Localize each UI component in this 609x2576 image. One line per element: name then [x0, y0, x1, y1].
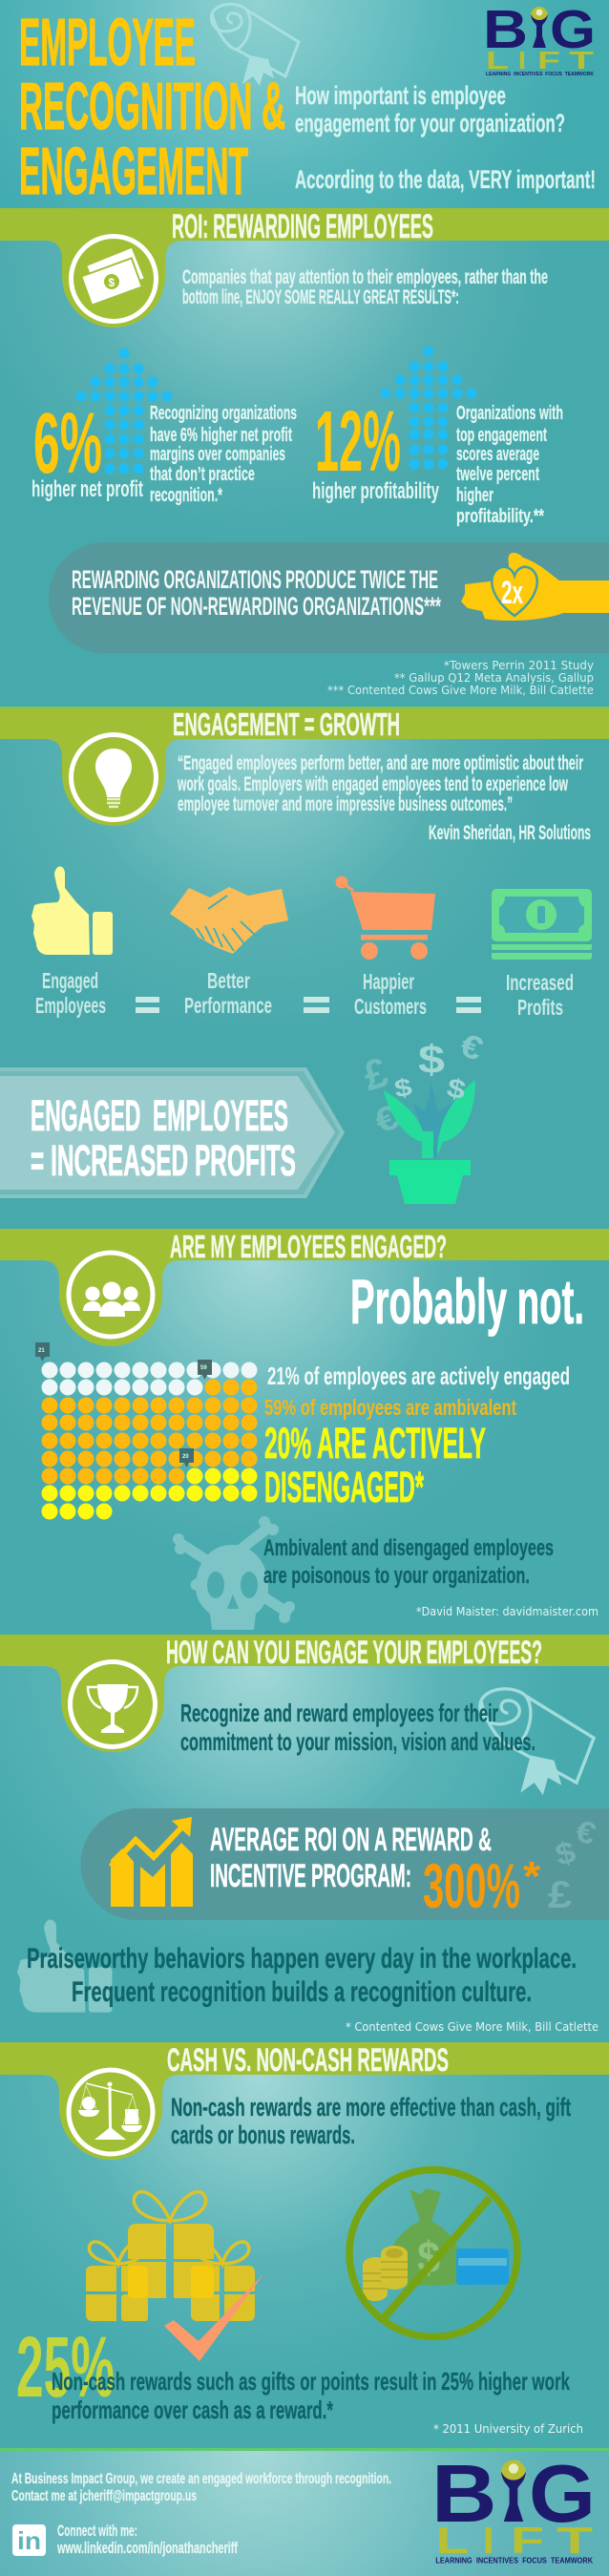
connect text: www.linkedin.com/in/jonathancheriff [56, 2539, 238, 2557]
heading band [0, 707, 609, 742]
equation labels: Customers [354, 994, 427, 1019]
icon: rising chart [111, 1817, 193, 1907]
icon: no cash sign: $ [417, 2232, 440, 2282]
icon: gift boxes [86, 2192, 255, 2321]
footnotes: *Towers Perrin 2011 Study [444, 658, 595, 672]
header: RECOGNITION & [19, 69, 285, 143]
icon: LinkedIn [12, 2524, 46, 2556]
text: recognizing organizations: recognition.* [150, 485, 222, 506]
text: organizations with top engagement: twelve percent [456, 464, 539, 485]
text: recognizing organizations: that don’t practice [150, 464, 255, 485]
connect text: Connect with me: [57, 2522, 137, 2540]
icon: pale currency symbols [548, 1813, 599, 1916]
icon: money badge [45, 237, 182, 327]
icon: shopping cart [336, 876, 435, 960]
icon: people badge [42, 1253, 179, 1346]
stat: 12% higher profitability: 12% [315, 394, 401, 490]
text: recognizing organizations: have 6% higher net profit [150, 425, 292, 446]
icon: money badge: $ [109, 276, 115, 289]
icon: money plant: $ [418, 1037, 445, 1082]
panel: how can you engage [0, 1635, 609, 2034]
icon: diploma [211, 4, 299, 86]
icon: scales badge [42, 2070, 179, 2160]
text: poisonous [263, 1535, 554, 1589]
icon: skull and crossbones [173, 1516, 295, 1630]
logo: Big Lift: LEARNING INCENTIVES FOCUS TEAMWORK [486, 72, 594, 77]
icon: hand with heart [461, 553, 609, 621]
icon: LinkedIn: in [17, 2526, 41, 2555]
panel: ROI rewarding employees [0, 208, 609, 697]
callout arrow: engaged employees = increased profits: ENGAGED EMPLOYEES [31, 1091, 288, 1140]
marker pins [35, 1342, 212, 1467]
connect text [56, 2522, 238, 2557]
marker pins: 21 [38, 1348, 45, 1354]
icon: money plant [359, 1026, 488, 1204]
logo: Big Lift large: T [556, 2521, 594, 2562]
footnote: * 2011 University of Zurich [433, 2421, 583, 2436]
text: non-cash rewards are more effective [171, 2093, 571, 2149]
heading band: ENGAGEMENT = GROWTH [173, 707, 400, 742]
footnotes: *** Contented Cows Give More Milk, Bill Catlette [327, 683, 594, 697]
logo: Big Lift large [431, 2448, 596, 2565]
text: higher work performance [52, 2367, 570, 2424]
icon: money plant: $ [444, 1072, 469, 1106]
logo: Big Lift large: L [435, 2521, 469, 2562]
footer [0, 2448, 609, 2565]
text: non-cash rewards are more effective: cards or bonus rewards. [171, 2121, 355, 2149]
text: higher work performance: performance over cash as a reward.* [52, 2396, 334, 2424]
contact text: Contact me at jcheriff@impactgroup.us [11, 2488, 197, 2504]
text: recognizing organizations: Recognizing organizations [150, 403, 297, 424]
contact text [11, 2471, 391, 2504]
panel: engagement equals growth [0, 707, 609, 1204]
callout arrow: engaged employees = increased profits: = INCREASED PROFITS [31, 1136, 296, 1185]
icon: money plant: € [455, 1026, 488, 1068]
title: EMPLOYEE [19, 5, 196, 79]
title: ENGAGEMENT [19, 134, 248, 208]
icon: light bulb badge [45, 735, 182, 826]
equation labels: Employees [35, 993, 106, 1018]
legend text [264, 1362, 570, 1511]
icon: pale diploma [480, 1689, 594, 1795]
legend text: DISENGAGED* [264, 1463, 424, 1511]
logo: Big Lift [483, 0, 596, 77]
stat: 12% higher profitability [312, 394, 439, 504]
marker pins: 59 [200, 1365, 207, 1371]
legend text: 59% of employees are ambivalent [264, 1395, 516, 1420]
logo: Big Lift large: LEARNING INCENTIVES FOCUS TEAMWORK [435, 2556, 593, 2565]
subtitle [295, 81, 596, 194]
title [19, 5, 285, 208]
logo: Big Lift large: B [431, 2448, 496, 2539]
icon: money plant: $ [392, 1072, 414, 1103]
text: organizations with top engagement: top engagement [456, 425, 547, 446]
icon: money plant: £ [359, 1049, 393, 1100]
icon: check mark [164, 2274, 263, 2361]
logo: Big Lift large: F [511, 2521, 544, 2562]
text: organizations with top engagement: profitability.** [456, 506, 544, 527]
footnotes: ** Gallup Q12 Meta Analysis, Gallup [394, 670, 594, 685]
text: recognize and reward [180, 1699, 536, 1756]
text: praiseworthy behaviors [27, 1943, 577, 2008]
equation labels: Engaged [42, 968, 98, 993]
equation labels: Increased [506, 970, 574, 995]
stat: 25%: 25% [16, 2320, 115, 2416]
header [19, 0, 596, 208]
text: recognizing organizations [150, 403, 297, 506]
footnotes [327, 658, 595, 697]
stat: 12% higher profitability: higher profitability [312, 478, 439, 504]
icon: pale currency symbols: $ [552, 1834, 579, 1872]
callout: average ROI: 300% [423, 1850, 520, 1921]
icon: hand with heart: 2x [501, 575, 523, 611]
equation labels: Profits [517, 995, 563, 1020]
logo: Big Lift: T [569, 46, 594, 74]
stat: 6% higher net profit: 6% [33, 396, 102, 492]
icon: pale currency symbols: € [572, 1813, 599, 1851]
logo: Big Lift: F [537, 46, 560, 74]
text: organizations with top engagement: scores average [456, 444, 539, 465]
chart: dotted up arrow 1 [76, 348, 172, 474]
equation labels: Performance [184, 993, 272, 1018]
logo: Big Lift large: I [483, 2521, 494, 2562]
icon: trophy badge [44, 1661, 181, 1752]
text: organizations with top engagement [456, 403, 563, 527]
logo: Big Lift large: G [529, 2448, 596, 2539]
chart: 100 dot waffle [35, 1342, 258, 1520]
callout: average ROI: * [523, 1853, 541, 1900]
quote [177, 752, 591, 844]
equals signs [136, 997, 481, 1013]
text: recognizing organizations: margins over companies [150, 444, 285, 465]
marker pins: 20 [182, 1454, 189, 1460]
icon: stack of cash [492, 889, 592, 960]
text: organizations with top engagement: higher [456, 485, 494, 506]
callout arrow: engaged employees = increased profits [0, 1067, 345, 1198]
logo: Big Lift: G [550, 0, 596, 60]
stat: 6% higher net profit: higher net profit [32, 476, 143, 502]
panel: are my employees engaged [0, 1229, 609, 1630]
logo: Big Lift: B [483, 0, 528, 60]
icon: thumbs up [32, 866, 113, 955]
panel: cash vs non-cash rewards [0, 2042, 609, 2436]
chart: dotted up arrow 2 [380, 346, 477, 470]
logo: Big Lift: L [486, 46, 509, 74]
icon: no cash sign [349, 2169, 517, 2337]
contact text: At Business Impact Group, we create an engaged workforce through recognition. [11, 2471, 391, 2487]
icon: handshake [170, 887, 288, 954]
equation labels: Better [207, 968, 250, 993]
callout: average ROI [80, 1808, 609, 1921]
callout: twice the revenue [49, 542, 609, 653]
intro text [182, 266, 548, 308]
icon: pale thumbs up [17, 1920, 112, 2013]
logo: Big Lift: I [518, 46, 526, 74]
equation labels [35, 968, 574, 1020]
icon: pale currency symbols: £ [548, 1874, 572, 1916]
callout: average ROI: INCENTIVE PROGRAM: [210, 1858, 411, 1894]
equation labels: Happier [363, 969, 414, 994]
icon: money plant: € [369, 1096, 404, 1141]
